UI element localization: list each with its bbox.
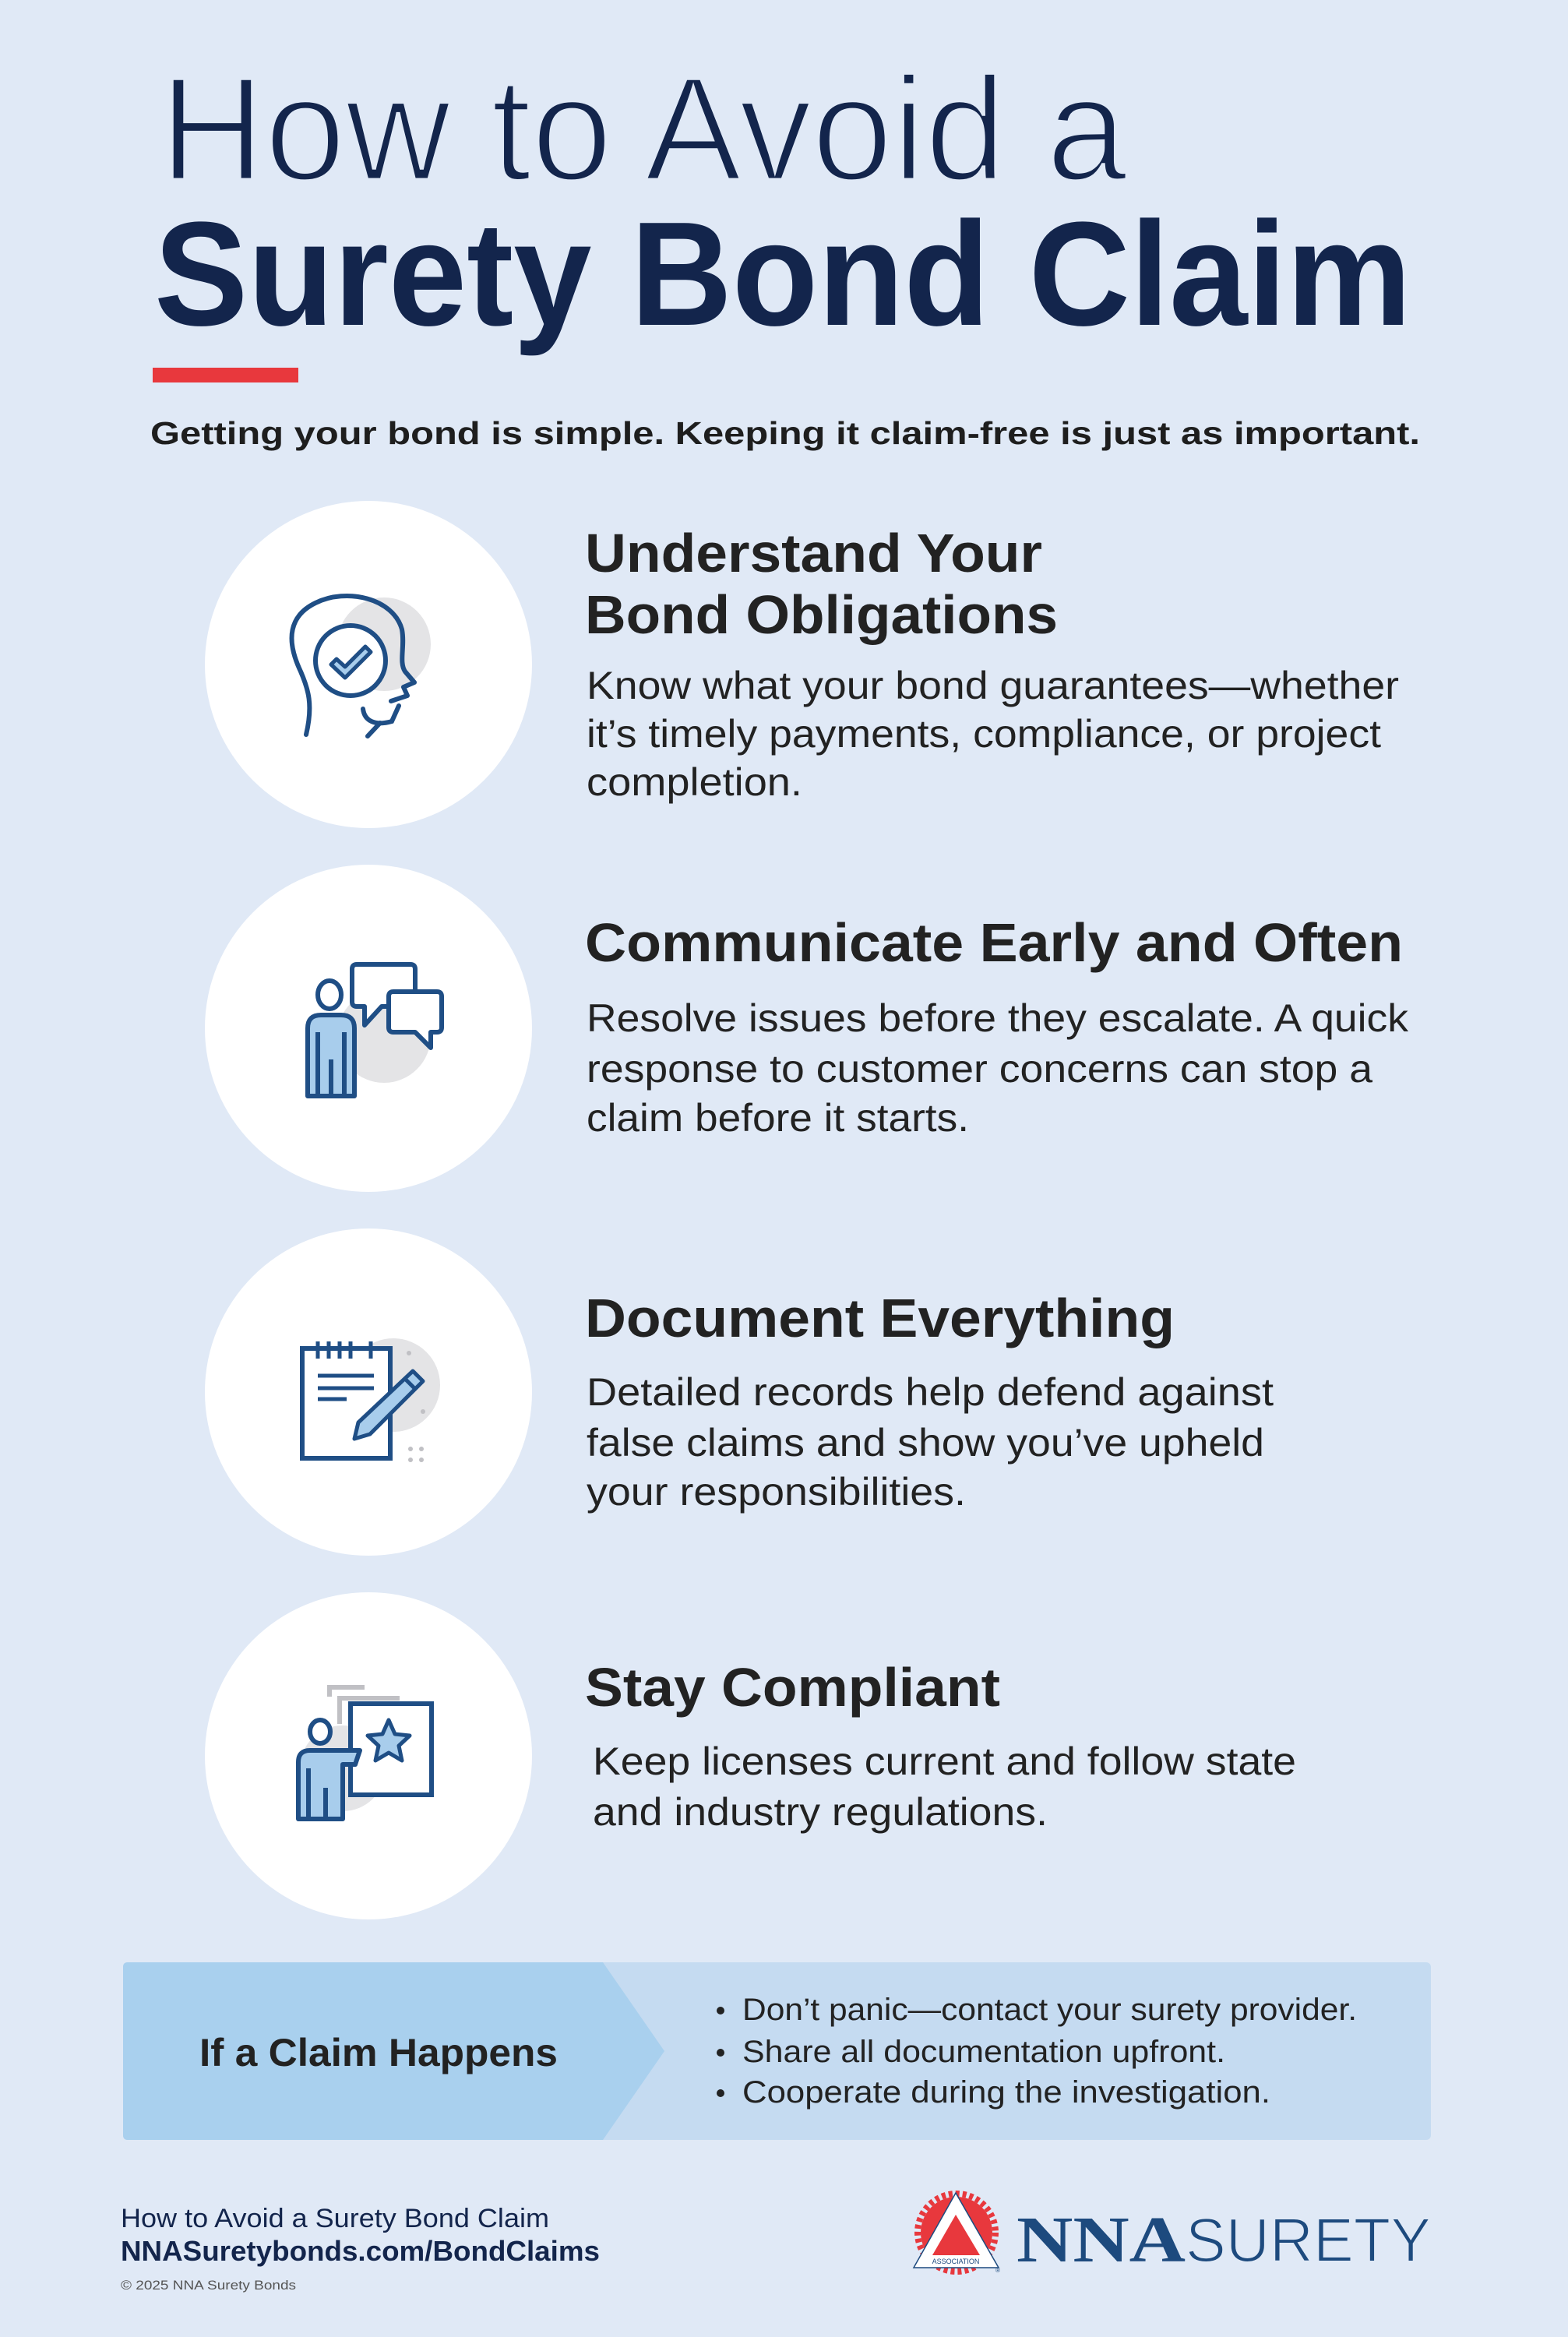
body text: and industry regulations. [593, 1790, 1048, 1834]
body text: Know what your bond guarantees—whether [587, 664, 1399, 707]
heading: Communicate Early and Often [585, 912, 1403, 973]
bullet list: Don’t panic—contact your surety provider. [742, 1993, 1357, 2027]
body text: Detailed records help defend against [587, 1370, 1274, 1414]
heading: Stay Compliant [585, 1657, 1000, 1718]
panel: communicate [205, 865, 1409, 1192]
icon: notepad and pencil [205, 1228, 532, 1556]
body text: Keep licenses current and follow state [593, 1740, 1296, 1783]
footer text [121, 2204, 600, 2293]
heading: Bond Obligations [585, 584, 1058, 645]
icon: person with speech bubbles [205, 865, 532, 1192]
body text: completion. [587, 760, 802, 804]
panel: document [205, 1228, 1274, 1556]
panel: stay compliant [205, 1592, 1296, 1919]
title: Surety Bond Claim [154, 192, 1411, 357]
footer text: © 2025 NNA Surety Bonds [121, 2278, 296, 2293]
logo: NNA Surety: NNA [1017, 2204, 1186, 2276]
icon: head with check [205, 501, 532, 828]
icon: presenter with star board [205, 1592, 532, 1919]
body text: false claims and show you’ve upheld [587, 1421, 1264, 1465]
body text: Resolve issues before they escalate. A quick [587, 996, 1409, 1040]
logo: NNA Surety [914, 2193, 1431, 2276]
callout: if a claim happens [123, 1962, 1431, 2140]
bullet list [717, 1993, 1357, 2110]
title: How to Avoid a [160, 47, 1127, 212]
body text: claim before it starts. [587, 1096, 969, 1140]
body text [593, 1740, 1296, 1834]
body text [587, 1370, 1274, 1514]
heading: Document Everything [585, 1288, 1175, 1348]
footer text: NNASuretybonds.com/BondClaims [121, 2235, 600, 2267]
logo: NNA Surety: SURETY [1186, 2205, 1431, 2275]
arrow label [123, 1962, 664, 2140]
heading: Understand Your [585, 523, 1042, 583]
body text: response to customer concerns can stop a [587, 1047, 1372, 1091]
panel: understand obligations [205, 501, 1399, 828]
title [154, 47, 1411, 357]
bullet list: Cooperate during the investigation. [742, 2075, 1270, 2110]
body text: your responsibilities. [587, 1470, 966, 1514]
icon: notary seal: ® [995, 2267, 1000, 2274]
bullet list: Share all documentation upfront. [742, 2035, 1225, 2069]
icon: notary seal [914, 2193, 1000, 2274]
icon: notary seal: ASSOCIATION [932, 2258, 979, 2265]
body text [587, 996, 1409, 1140]
callout: if a claim happens: If a Claim Happens [199, 2031, 558, 2074]
body text: it’s timely payments, compliance, or project [587, 712, 1381, 756]
footer text: How to Avoid a Surety Bond Claim [121, 2204, 549, 2233]
heading [585, 523, 1058, 645]
body text [587, 664, 1399, 804]
subtitle: Getting your bond is simple. Keeping it claim-free is just as important. [150, 415, 1420, 451]
red accent bar [153, 368, 298, 382]
